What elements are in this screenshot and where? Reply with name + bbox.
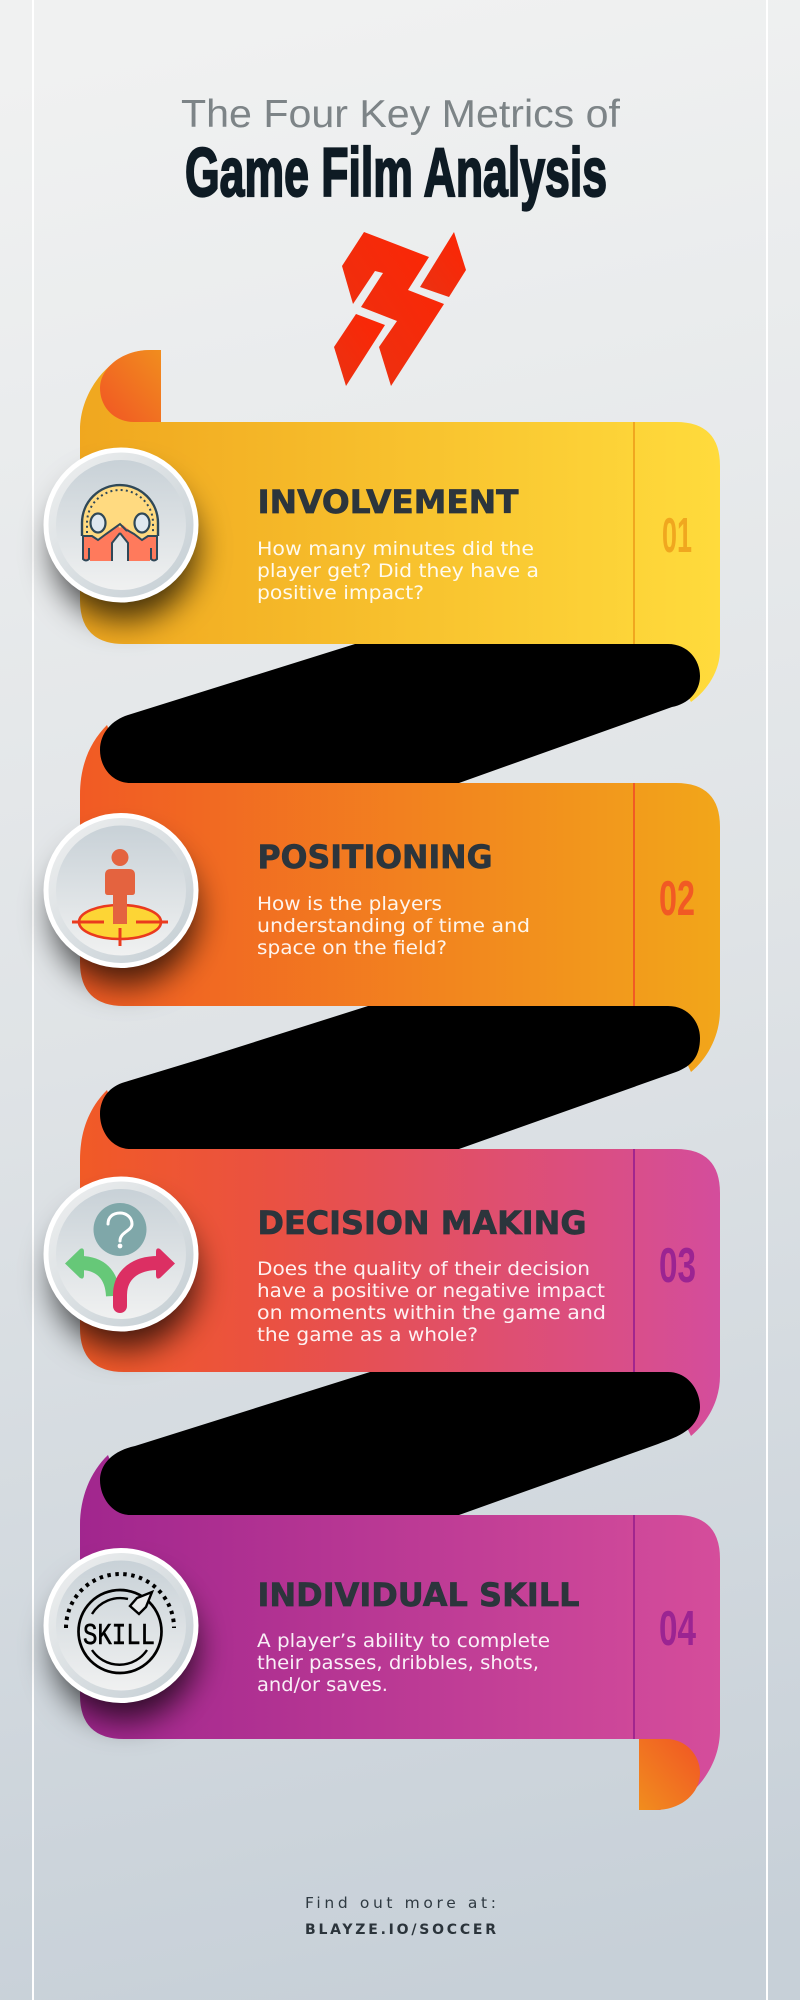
banner shape 1 xyxy=(80,350,720,702)
icon: high five xyxy=(82,485,158,561)
icon: question and forked arrows xyxy=(65,1203,175,1306)
description: player get? Did they have a xyxy=(257,560,539,582)
banner shape 3 xyxy=(80,1090,720,1436)
footer line one: Find out more at: xyxy=(305,1894,496,1912)
black connector strip 3 xyxy=(100,1372,700,1515)
panel: decision making xyxy=(80,1090,720,1436)
number 04: 04 xyxy=(659,1602,696,1656)
description: positive impact? xyxy=(257,582,424,604)
number 01: 01 xyxy=(662,509,692,563)
footer link: BLAYZE.IO/SOCCER xyxy=(305,1922,496,1938)
description: and/or saves. xyxy=(257,1674,388,1696)
divider xyxy=(633,1515,635,1739)
description xyxy=(257,1258,606,1346)
top scroll curl xyxy=(100,350,161,422)
icon badge: involvement xyxy=(46,450,197,620)
description: space on the field? xyxy=(257,937,447,959)
description: How many minutes did the xyxy=(257,538,534,560)
divider xyxy=(633,783,635,1006)
icon: skill gauge: SKILL xyxy=(83,1619,155,1654)
heading: POSITIONING xyxy=(258,838,492,876)
heading: INDIVIDUAL SKILL xyxy=(258,1576,580,1614)
description: on moments within the game and xyxy=(257,1302,606,1324)
description: their passes, dribbles, shots, xyxy=(257,1652,539,1674)
description: the game as a whole? xyxy=(257,1324,478,1346)
description: How is the players xyxy=(257,893,442,915)
divider xyxy=(633,422,635,644)
icon badge: positioning xyxy=(46,816,197,985)
panel: positioning xyxy=(80,725,720,1072)
title block xyxy=(181,93,620,211)
description: A player’s ability to complete xyxy=(257,1630,550,1652)
panel: involvement xyxy=(80,350,720,702)
number 03: 03 xyxy=(659,1239,696,1293)
description: understanding of time and xyxy=(257,915,530,937)
icon: player on target xyxy=(72,849,168,946)
description: Does the quality of their decision xyxy=(257,1258,590,1280)
icon: red logo xyxy=(334,232,466,386)
footer xyxy=(305,1894,496,1938)
description xyxy=(257,1630,550,1696)
icon badge: decision making xyxy=(46,1179,197,1349)
title line one: The Four Key Metrics of xyxy=(181,93,620,136)
icon: skill gauge xyxy=(66,1574,174,1673)
description: have a positive or negative impact xyxy=(257,1280,605,1302)
description xyxy=(257,893,530,959)
banner shape 4 xyxy=(80,1455,720,1810)
banner shape 2 xyxy=(80,725,720,1072)
heading: DECISION MAKING xyxy=(258,1204,586,1242)
icon badge: individual skill xyxy=(46,1550,197,1720)
bottom scroll curl xyxy=(639,1739,700,1810)
number 02: 02 xyxy=(659,872,695,926)
black connector strip 2 xyxy=(100,1006,700,1149)
description xyxy=(257,538,539,604)
black connector strip 1 xyxy=(100,644,700,783)
heading: INVOLVEMENT xyxy=(258,483,519,521)
divider xyxy=(633,1149,635,1372)
panel: individual skill xyxy=(80,1455,720,1810)
